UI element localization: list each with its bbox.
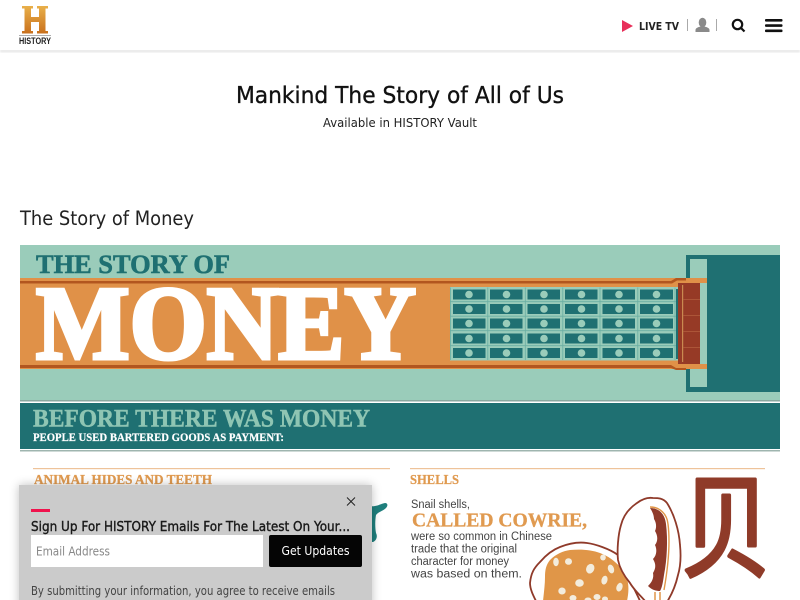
- panel heading: ANIMAL HIDES AND TEETH: [34, 473, 212, 488]
- shells text: character for money: [411, 556, 509, 568]
- shells text: were so common in Chinese: [410, 531, 552, 543]
- popup heading: Sign Up For HISTORY Emails For The Latest On Your...: [31, 519, 350, 535]
- shells text: trade that the original: [411, 544, 517, 556]
- shells text: was based on them.: [410, 568, 522, 580]
- infographic banner: [20, 245, 780, 400]
- icon: user: [687, 18, 717, 32]
- icon: close: [347, 498, 355, 506]
- panel: shells: [410, 439, 771, 600]
- shells text: Snail shells,: [411, 499, 470, 511]
- heading: money: MONEY: [36, 264, 416, 382]
- band subheading: PEOPLE USED BARTERED GOODS AS PAYMENT:: [33, 432, 284, 444]
- section band: before there was money: [20, 400, 780, 452]
- icon: menu: [765, 19, 782, 32]
- signup popup: [19, 485, 372, 600]
- wallet clasp: [678, 283, 700, 364]
- banknote stack: [450, 287, 678, 360]
- submit button: Get Updates: [282, 544, 350, 558]
- icon: HISTORY logo: HISTORY: [19, 36, 52, 47]
- accent bar: [31, 509, 50, 512]
- consent text: By submitting your information, you agree to receive emails: [31, 584, 335, 598]
- belt strap: [20, 278, 707, 370]
- icon: live tv play: [622, 20, 633, 32]
- submit button: [269, 535, 362, 567]
- icon: cowrie shell back: [530, 543, 642, 600]
- wallet frame: [686, 255, 780, 392]
- icon: search: [733, 20, 744, 32]
- subtitle: Available in HISTORY Vault: [323, 115, 477, 130]
- icon: animal hide: [370, 503, 387, 542]
- page title: Mankind The Story of All of Us: [236, 81, 564, 109]
- chinese character for money: 贝: [681, 439, 771, 600]
- shells text: [410, 499, 587, 580]
- header bar: [0, 0, 800, 52]
- panel: animal hides and teeth: [33, 468, 390, 542]
- email input: [31, 535, 263, 567]
- live tv label: LIVE TV: [639, 20, 679, 33]
- icon: cowrie shell front: [618, 498, 681, 600]
- icon: HISTORY logo: [19, 6, 52, 47]
- email input: Email Address: [36, 544, 110, 558]
- panel heading: SHELLS: [410, 473, 459, 488]
- shells text: CALLED COWRIE,: [412, 510, 587, 532]
- section heading: The Story of Money: [19, 207, 194, 230]
- heading: the story of: THE STORY OF: [36, 250, 230, 279]
- band heading: BEFORE THERE WAS MONEY: [33, 406, 370, 432]
